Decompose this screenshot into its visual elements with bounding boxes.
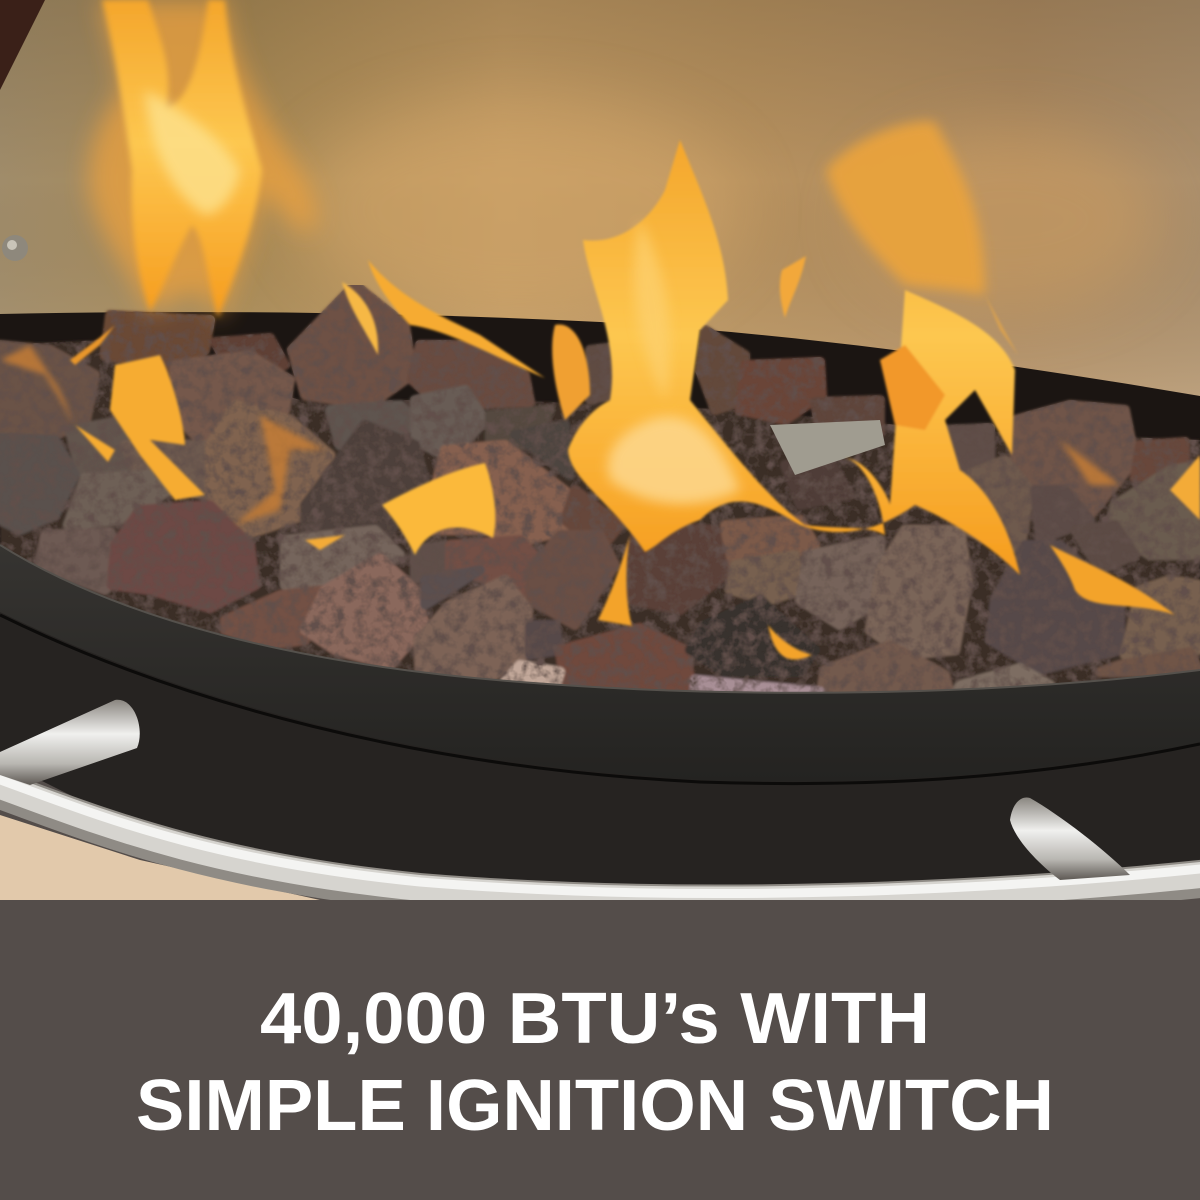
caption panel — [0, 900, 1200, 1200]
lava rocks — [0, 285, 1200, 700]
lower rim highlight — [0, 615, 1200, 784]
flames — [0, 0, 1200, 660]
title: 40,000 BTU’s WITH — [260, 979, 930, 1059]
dark burner interior — [0, 312, 1200, 720]
title: SIMPLE IGNITION SWITCH — [136, 1066, 1054, 1146]
flame: pale hot core — [608, 416, 740, 504]
silver rail — [0, 778, 1200, 904]
dark bowl body — [0, 610, 1200, 905]
black upper rim ring — [0, 545, 1200, 782]
flame: upper right soft — [826, 121, 985, 295]
glowing rock edges — [0, 345, 1120, 525]
flame: upper left — [89, 0, 316, 320]
steel wind shroud background — [0, 0, 1200, 400]
perforated burner plate — [770, 420, 885, 475]
cream floor at left — [0, 720, 320, 900]
right handle bracket — [1010, 797, 1130, 880]
left handle bracket — [0, 700, 140, 785]
flame: centre and right — [70, 140, 1200, 660]
photo: fire pit with lava rocks and flames — [0, 0, 1200, 905]
